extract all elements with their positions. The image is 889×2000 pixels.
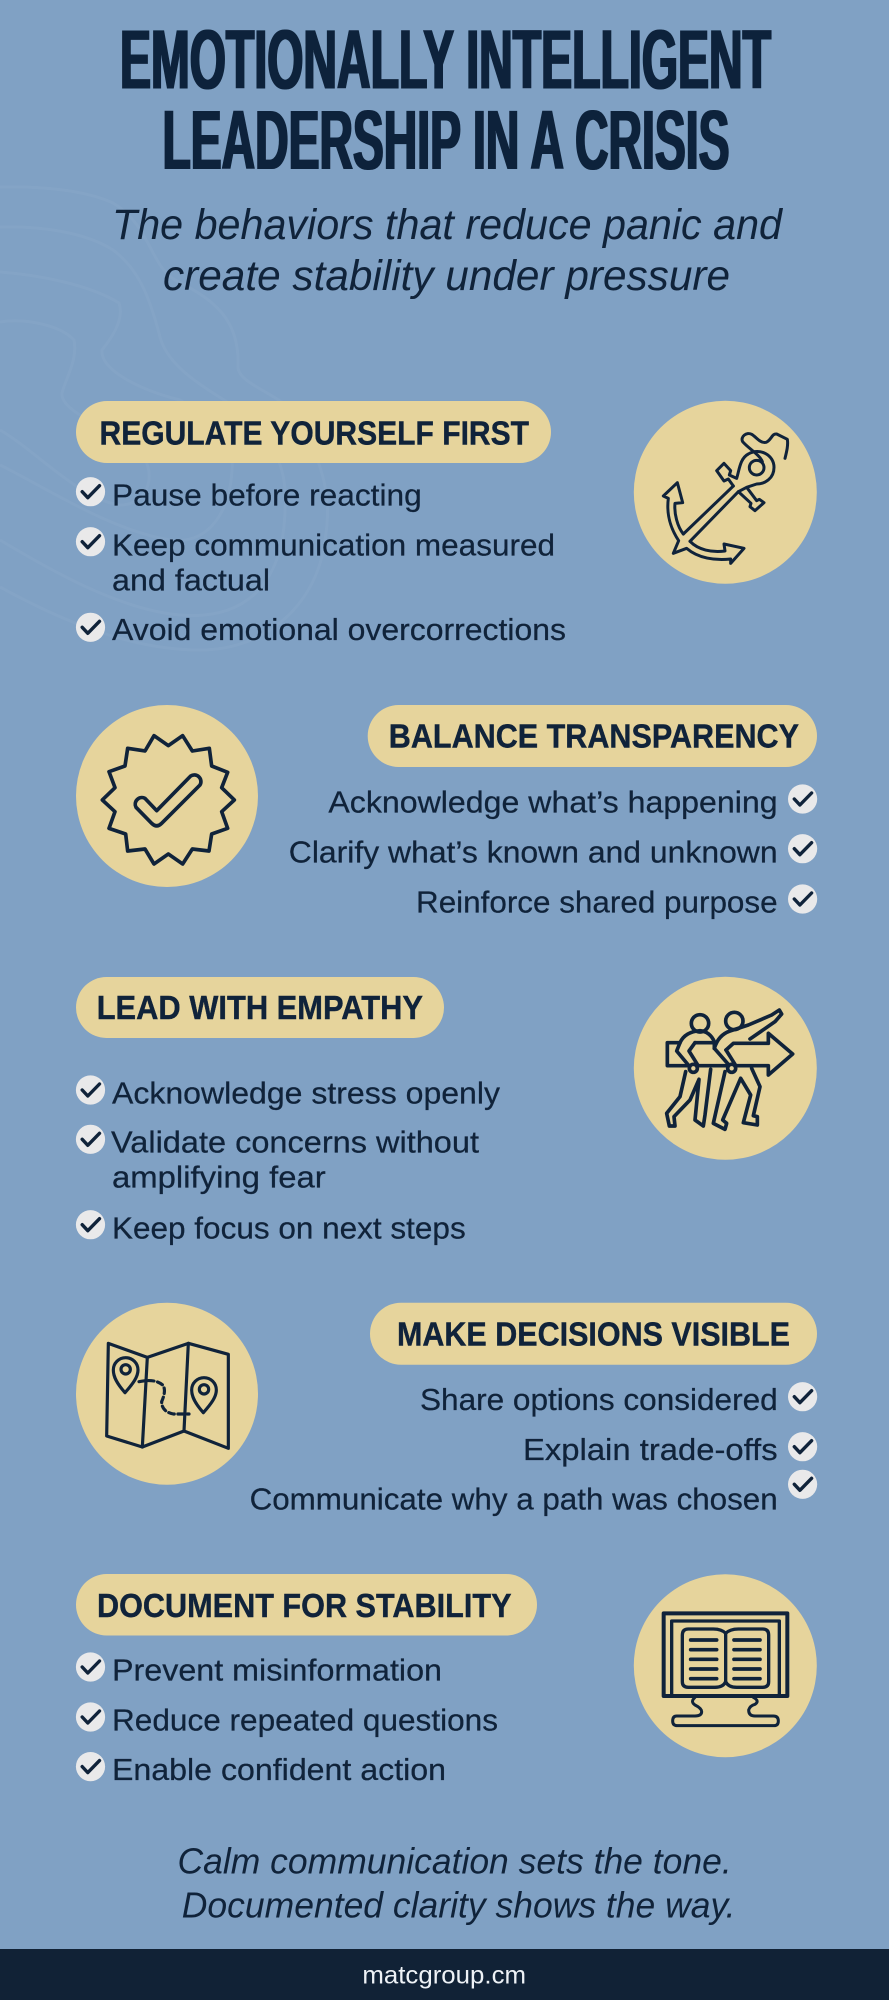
- closing statement: Documented clarity shows the way.: [182, 1884, 736, 1925]
- heading pill: [370, 1303, 817, 1365]
- bullet text: Acknowledge stress openly: [112, 1075, 501, 1110]
- bullet text: Reinforce shared purpose: [416, 885, 778, 920]
- panel: balance transparency: [76, 705, 817, 920]
- footer bar: matcgroup.cm: [362, 1961, 526, 1989]
- closing statement: [178, 1840, 736, 1925]
- heading pill: LEAD WITH EMPATHY: [97, 989, 423, 1026]
- icon: two leaders carrying arrow: [634, 977, 817, 1160]
- bullet text: Keep communication measured: [112, 528, 555, 563]
- bullet text: Enable confident action: [112, 1752, 446, 1787]
- panel: regulate yourself first: [76, 401, 817, 647]
- bullet text: Acknowledge what’s happening: [328, 785, 778, 820]
- icon: verified badge: [76, 705, 258, 887]
- bullet text: [111, 1124, 479, 1195]
- panel: make decisions visible: [76, 1303, 817, 1516]
- icon: open book on monitor: [634, 1574, 817, 1757]
- check icon: [76, 527, 105, 556]
- subtitle: [112, 201, 784, 300]
- heading pill: REGULATE YOURSELF FIRST: [100, 414, 529, 451]
- bullet text: Share options considered: [420, 1382, 778, 1417]
- check icon: [76, 1752, 105, 1781]
- heading pill: [76, 401, 551, 463]
- check icon: [76, 1210, 105, 1239]
- check icon: [76, 613, 105, 642]
- heading pill: [76, 1574, 537, 1636]
- bullet text: Validate concerns without: [111, 1124, 479, 1159]
- subtitle: The behaviors that reduce panic and: [112, 201, 784, 249]
- check icon: [76, 1125, 105, 1154]
- panel: document for stability: [76, 1574, 817, 1787]
- check icon: [788, 834, 817, 863]
- heading pill: MAKE DECISIONS VISIBLE: [397, 1316, 790, 1353]
- check icon: [788, 1432, 817, 1461]
- bullet text: and factual: [112, 563, 270, 598]
- check icon: [788, 1470, 817, 1499]
- bullet text: Explain trade-offs: [523, 1432, 778, 1467]
- title: [120, 12, 771, 187]
- heading pill: [368, 705, 817, 767]
- closing statement: Calm communication sets the tone.: [178, 1840, 732, 1881]
- heading pill: DOCUMENT FOR STABILITY: [97, 1587, 512, 1624]
- panel: lead with empathy: [76, 977, 817, 1245]
- bullet text: Avoid emotional overcorrections: [112, 612, 566, 647]
- check icon: [76, 1075, 105, 1105]
- bullet text: Keep focus on next steps: [112, 1210, 466, 1245]
- check icon: [76, 477, 105, 506]
- check icon: [788, 884, 817, 914]
- bullet text: Communicate why a path was chosen: [250, 1481, 778, 1516]
- check icon: [788, 784, 817, 814]
- bullet text: amplifying fear: [112, 1160, 326, 1195]
- heading pill: [76, 977, 444, 1038]
- bullet text: Reduce repeated questions: [112, 1702, 498, 1738]
- bullet text: Pause before reacting: [112, 478, 422, 513]
- icon: anchor: [634, 401, 817, 584]
- bullet text: Clarify what’s known and unknown: [289, 835, 778, 870]
- footer bar: [0, 1949, 889, 2000]
- check icon: [76, 1652, 105, 1682]
- heading pill: BALANCE TRANSPARENCY: [389, 718, 799, 755]
- check icon: [788, 1382, 817, 1411]
- icon: map with pins: [76, 1303, 258, 1485]
- check icon: [76, 1702, 105, 1732]
- bullet text: Prevent misinformation: [112, 1652, 442, 1688]
- bullet text: [112, 528, 555, 598]
- subtitle: create stability under pressure: [163, 252, 730, 300]
